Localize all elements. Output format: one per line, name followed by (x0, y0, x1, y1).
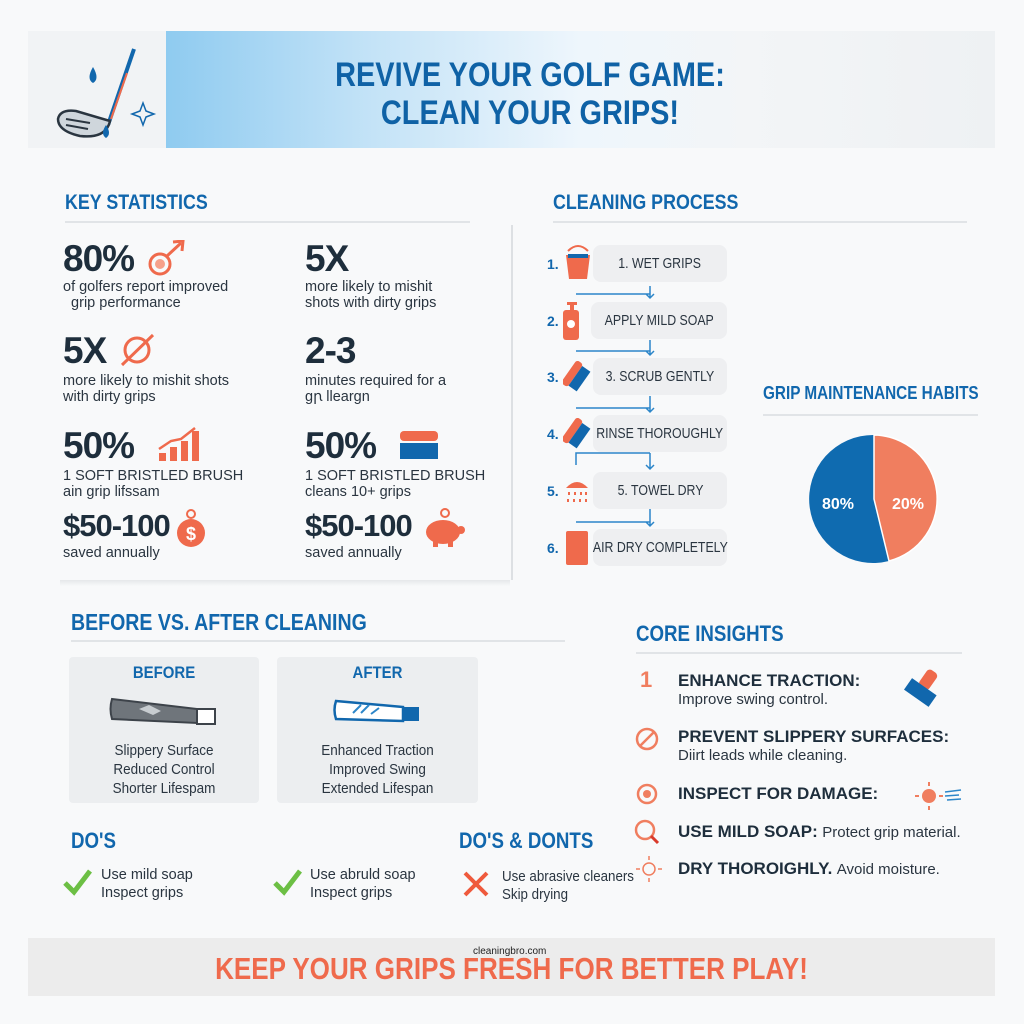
stat: 5X left: 5X (63, 330, 106, 371)
stat: 5X right: shots with dirty grips (305, 295, 436, 311)
insight 5 (630, 855, 970, 883)
stat: savings right (305, 508, 465, 561)
stat: savings left: saved annually (63, 545, 160, 561)
insight 5: DRY THOROIGHLY. Avoid moisture. (678, 859, 940, 878)
stat: 80% (63, 238, 228, 311)
pie chart: 20% (892, 496, 924, 513)
step 3: 3. SCRUB GENTLY (606, 368, 714, 384)
insight 2: PREVENT SLIPPERY SURFACES: (678, 727, 949, 746)
stat: 5X left (63, 330, 229, 405)
icon: sun and wind (913, 781, 969, 811)
step 5: 5. TOWEL DRY (617, 482, 703, 498)
item: check 1 (63, 867, 193, 901)
step 4: 4. (547, 426, 559, 442)
panel: do's & donts (459, 828, 634, 903)
icon: shower (566, 482, 588, 502)
step 1: 1. WET GRIPS (619, 256, 701, 272)
stat: 50% right: 50% (305, 425, 376, 466)
item: check 1: Use mild soap (101, 867, 193, 883)
footer banner (28, 938, 995, 996)
step 6 (547, 529, 728, 566)
stat: 50% left (63, 425, 243, 500)
step 4 (547, 415, 727, 452)
footer slogan: KEEP YOUR GRIPS FRESH FOR BETTER PLAY! (215, 951, 808, 986)
card: before: Slippery Surface (114, 742, 214, 759)
step 1 (547, 245, 727, 282)
icon: bar chart arrow (158, 427, 199, 461)
icon: money bag: $ (186, 524, 196, 544)
icon: clean grip (333, 700, 419, 722)
title: CLEAN YOUR GRIPS! (381, 94, 679, 132)
stat: 2-3: minutes required for a (305, 373, 446, 389)
panel: key statistics (63, 191, 485, 561)
icon: money bag (177, 509, 205, 547)
card: after: Extended Lifespan (322, 780, 433, 797)
insight 1: 1 (640, 667, 652, 692)
step 5: 5. (547, 483, 559, 499)
icon: crossed ball (121, 334, 154, 366)
heading: CORE INSIGHTS (636, 621, 784, 646)
icon: piggy bank (426, 508, 465, 547)
item: check 2: Inspect grips (310, 885, 392, 901)
stat: savings right: $50-100 (305, 508, 412, 543)
icon: bucket (566, 245, 590, 279)
stat: 50% right: cleans 10+ grips (305, 484, 411, 500)
insight 3: INSPECT FOR DAMAGE: (678, 784, 878, 803)
stat: savings left (63, 508, 205, 561)
item: check 2 (273, 867, 416, 901)
header pattern (166, 31, 995, 148)
header banner (28, 31, 995, 148)
step 2 (547, 302, 727, 340)
arrows between steps (575, 286, 654, 527)
icon: golf ball arrow (148, 240, 185, 276)
step 2: APPLY MILD SOAP (604, 312, 714, 328)
step 1: 1. (547, 256, 559, 272)
panel: grip maintenance habits pie (763, 383, 979, 563)
step 5 (547, 472, 727, 509)
item: check 2: Use abruld soap (310, 867, 416, 883)
step 4: RINSE THOROUGHLY (597, 426, 723, 442)
insight 2: Diirt leads while cleaning. (678, 747, 847, 764)
stat: savings right: saved annually (305, 545, 402, 561)
card: after: Improved Swing (329, 761, 426, 778)
card: before: Reduced Control (113, 761, 215, 778)
insight 3 (630, 781, 970, 811)
card: after: AFTER (353, 663, 402, 682)
stat: savings left: $50-100 (63, 508, 170, 543)
stat: 5X left: with dirty grips (63, 389, 156, 405)
card: before: Shorter Lifespam (113, 780, 215, 797)
insight 4: USE MILD SOAP: Protect grip material. (678, 822, 961, 841)
card: after: Enhanced Traction (321, 742, 434, 759)
icon: brush (902, 667, 946, 711)
icon: brush (400, 431, 438, 459)
stat: 5X right: 5X (305, 238, 348, 279)
step 6: 6. (547, 540, 559, 556)
stat: 5X right: more likely to mishit (305, 279, 432, 295)
title: REVIVE YOUR GOLF GAME: (335, 56, 725, 94)
step 6: AIR DRY COMPLETELY (593, 540, 727, 556)
stat: 50% right: 1 SOFT BRISTLED BRUSH (305, 468, 485, 484)
icon: brush (563, 418, 590, 448)
title (335, 56, 725, 132)
insight 1: ENHANCE TRACTION: (678, 671, 860, 690)
icon: soap bottle (563, 302, 579, 340)
pie chart: 80% (822, 496, 854, 513)
heading: GRIP MAINTENANCE HABITS (763, 383, 979, 403)
item: cross: Use abrasive cleaners (502, 869, 634, 885)
stat: 2-3 (305, 330, 446, 405)
heading: DO'S & DONTS (459, 828, 593, 853)
item: cross: Skip drying (502, 887, 568, 903)
stat: 5X right (305, 238, 436, 311)
step 2: 2. (547, 313, 559, 329)
insight 1: Improve swing control. (678, 691, 828, 708)
item: check 1: Inspect grips (101, 885, 183, 901)
stat: 50% left: 1 SOFT BRISTLED BRUSH (63, 468, 243, 484)
card: after (277, 657, 478, 803)
heading: BEFORE VS. AFTER CLEANING (71, 609, 367, 635)
icon: golf club with drops (56, 48, 156, 138)
step 3: 3. (547, 369, 559, 385)
heading: KEY STATISTICS (65, 191, 208, 214)
stat: 2-3: 2-3 (305, 330, 355, 371)
stat: 50% left: 50% (63, 425, 134, 466)
insight 4 (630, 818, 970, 846)
pie chart (809, 435, 936, 563)
stat: 80%: grip performance (71, 295, 181, 311)
stat: 50% right (305, 425, 485, 500)
insight 1 (630, 667, 960, 711)
insight 2 (630, 725, 960, 769)
panel: do's (63, 828, 416, 901)
heading: DO'S (71, 828, 116, 853)
item: cross (462, 868, 642, 908)
icon: towel (566, 531, 588, 565)
stat: 50% left: ain grip lifssam (63, 484, 160, 500)
source text: cleaningbro.com (473, 946, 546, 957)
step 3 (547, 358, 727, 395)
stat: 2-3: gꞃ lleargn (305, 389, 370, 405)
card: before (69, 657, 259, 803)
heading: CLEANING PROCESS (553, 191, 738, 214)
stat: 80%: of golfers report improved (63, 279, 228, 295)
stat: 80%: 80% (63, 238, 134, 279)
stat: 5X left: more likely to mishit shots (63, 373, 229, 389)
card: before: BEFORE (133, 663, 195, 682)
icon: scrub brush (563, 361, 590, 392)
panel: core insights (630, 615, 970, 885)
icon: dirty grip (110, 698, 216, 725)
